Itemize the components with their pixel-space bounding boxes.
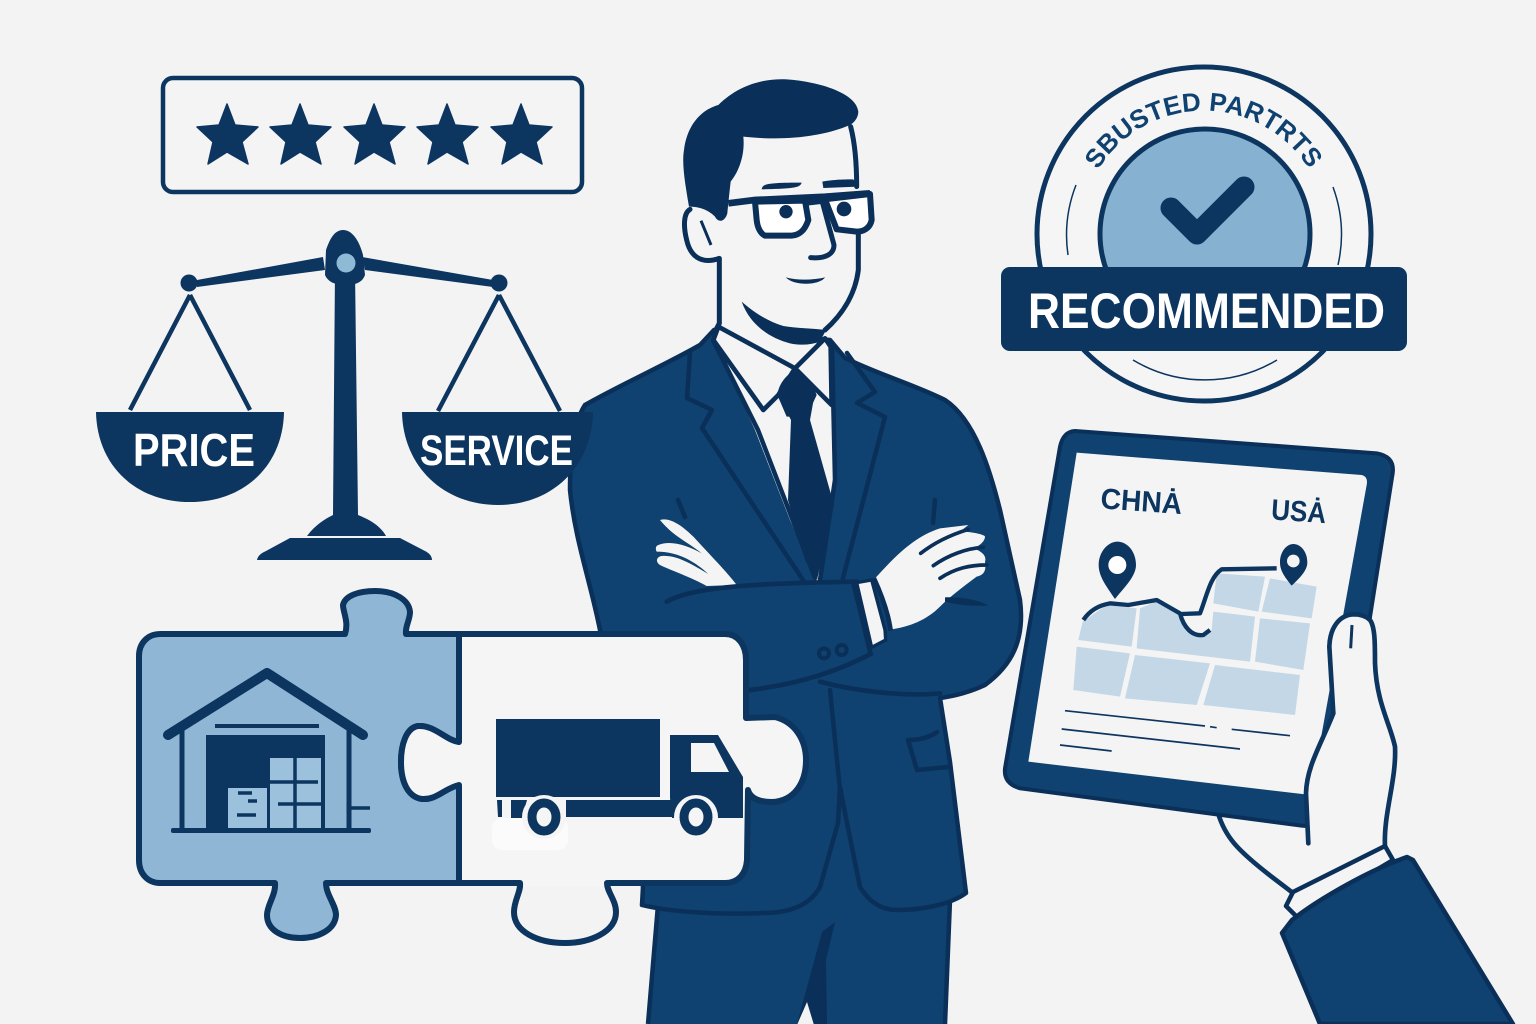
face outline and ear bbox=[684, 127, 858, 332]
mouth bbox=[786, 277, 825, 284]
badge: recommended seal bbox=[1001, 64, 1407, 404]
scale: base and column bbox=[257, 270, 432, 560]
scale: price pan bbox=[96, 412, 284, 502]
badge: curved caption: SBUSTED PARTRTS bbox=[1086, 92, 1322, 168]
puzzle: warehouse and truck pieces bbox=[139, 591, 806, 943]
hand: shirt cuff and sleeve bbox=[1282, 846, 1513, 1024]
hand: palm behind tablet bbox=[1218, 797, 1390, 893]
scale: price pan: PRICE bbox=[133, 424, 255, 476]
badge: thin inner arcs bbox=[1067, 185, 1341, 380]
scale: service pan bbox=[402, 412, 593, 505]
tablet: frame bbox=[1005, 431, 1393, 828]
panel: five star rating bbox=[163, 78, 582, 192]
puzzle: bottom notch background bbox=[518, 887, 612, 939]
tablet: screen bbox=[1028, 453, 1367, 795]
badge: ribbon bbox=[1001, 267, 1407, 351]
map: label china: CHNȦ bbox=[1100, 482, 1183, 521]
tablet: text lines bbox=[1060, 711, 1290, 751]
badge: ribbon: RECOMMENDED bbox=[1028, 283, 1385, 339]
map: pin usa bbox=[1280, 544, 1307, 586]
map: tiles bbox=[1073, 573, 1317, 715]
map: pin china bbox=[1099, 542, 1136, 599]
puzzle piece: white bbox=[401, 634, 806, 943]
scale: service pan: SERVICE bbox=[420, 427, 573, 475]
hand: thumb bbox=[1306, 614, 1395, 847]
icon: warehouse bbox=[168, 673, 371, 833]
icon: check mark bbox=[1171, 187, 1244, 234]
nose bbox=[811, 203, 834, 258]
person: suit jacket bbox=[570, 330, 1021, 914]
icon: truck bbox=[492, 719, 743, 850]
collar bbox=[713, 327, 832, 410]
person: head with glasses bbox=[683, 79, 872, 417]
glasses bbox=[755, 194, 872, 236]
scale: beam and strings bbox=[130, 257, 560, 411]
hair bbox=[683, 79, 858, 221]
badge: outer ring bbox=[1037, 67, 1371, 401]
person: crossed arms and hands bbox=[656, 519, 988, 694]
tablet: held in hand with route map bbox=[1005, 431, 1395, 893]
person: lapels and jacket seams bbox=[678, 340, 948, 790]
eyebrows bbox=[762, 179, 858, 189]
map: label usa: USȦ bbox=[1270, 493, 1327, 530]
scale: balance with price and service pans bbox=[96, 230, 593, 560]
person: trousers bbox=[648, 780, 950, 1024]
badge: blue disc bbox=[1100, 129, 1310, 339]
map: route bbox=[1083, 568, 1277, 635]
face skin bbox=[684, 123, 860, 368]
puzzle piece: light blue bbox=[139, 591, 459, 938]
person: shirt and tie bbox=[713, 338, 835, 585]
jaw shadow bbox=[742, 302, 826, 345]
scale: pivot bbox=[180, 230, 508, 292]
